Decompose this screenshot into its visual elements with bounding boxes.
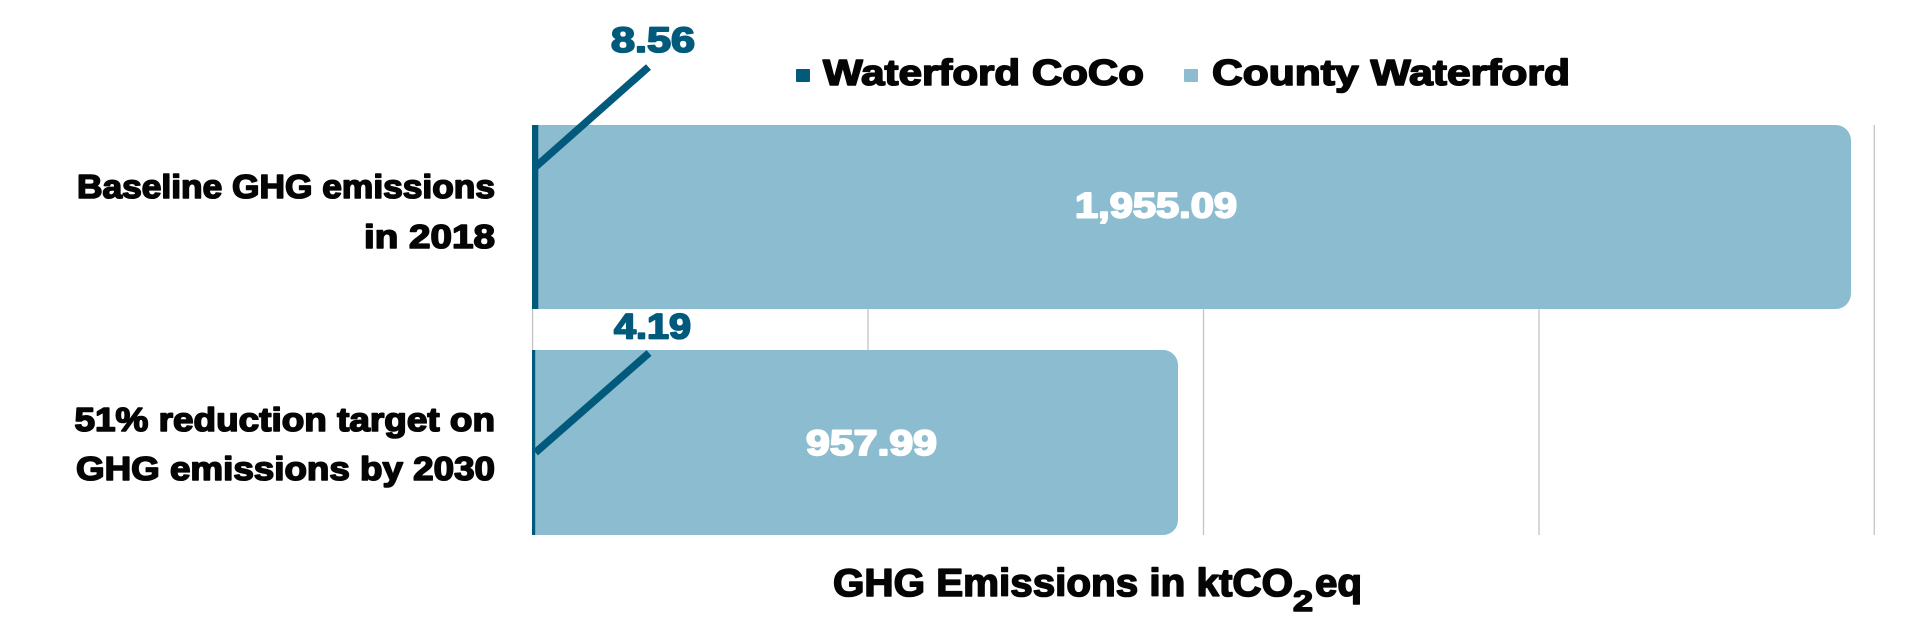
axis title: eq — [1315, 562, 1362, 605]
row label: reduction target: 51% reduction target on — [74, 401, 495, 438]
bar: County Waterford baseline: 1,955.09 — [1075, 186, 1237, 226]
row label: reduction target — [74, 401, 495, 487]
leader line: 8.56 — [536, 67, 648, 166]
row label: baseline — [77, 168, 495, 255]
bar: County Waterford baseline — [532, 125, 1851, 309]
bar: County Waterford target — [532, 350, 1178, 535]
bar: Waterford CoCo target — [532, 350, 535, 535]
legend item: County Waterford: County Waterford — [1212, 52, 1570, 93]
bar: Waterford CoCo baseline — [532, 125, 538, 309]
legend — [796, 52, 1570, 93]
axis title: 2 — [1293, 586, 1313, 618]
row label: baseline: in 2018 — [364, 218, 495, 255]
row label: baseline: Baseline GHG emissions — [77, 168, 495, 205]
bar: County Waterford target: 957.99 — [806, 424, 937, 463]
value label: 8.56: 8.56 — [611, 21, 695, 60]
axis title: GHG Emissions in ktCO — [833, 562, 1293, 605]
row label: reduction target: GHG emissions by 2030 — [76, 450, 495, 487]
axis title — [833, 562, 1362, 618]
leader line: 4.19 — [536, 353, 649, 452]
value label: 4.19: 4.19 — [614, 308, 691, 346]
legend item: Waterford CoCo: Waterford CoCo — [823, 52, 1144, 93]
